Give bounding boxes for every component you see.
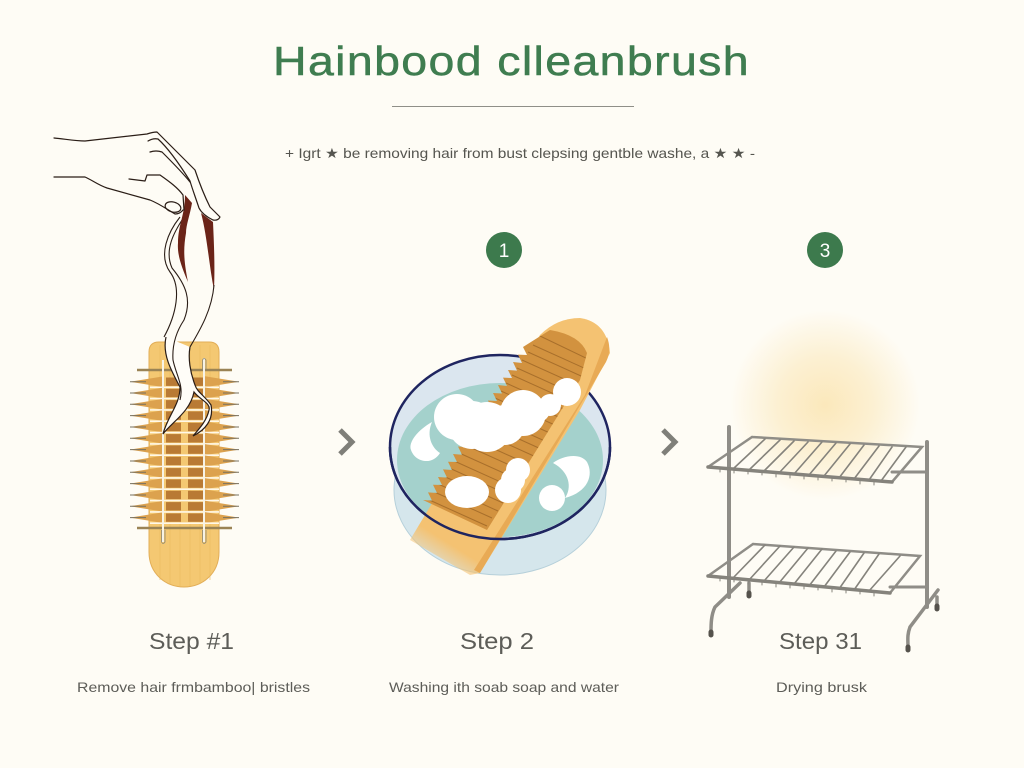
icon: bamboo brush — [130, 342, 239, 587]
icon: scrubbing brush — [410, 318, 610, 575]
icon: drying rack — [708, 427, 938, 650]
icon: soap suds — [410, 378, 590, 511]
badge: step 3: 3 — [820, 241, 830, 262]
badge: step 3 — [807, 232, 843, 268]
icon: hand — [54, 132, 220, 220]
panel: step 3 illustration — [708, 310, 938, 650]
step 2 description: Washing ith soab soap and water — [389, 679, 619, 695]
step 1 description: Remove hair frmbamboo| bristles — [77, 679, 310, 695]
arrow 1 — [340, 430, 352, 454]
title divider — [392, 106, 634, 107]
arrow 2 — [663, 430, 675, 454]
front bowl rim — [390, 447, 610, 539]
title: Hainbood clleanbrush — [273, 38, 750, 84]
badge: step 1 — [486, 232, 522, 268]
step 1 label: Step #1 — [149, 628, 234, 654]
panel: step 1 illustration — [54, 132, 239, 587]
icon: hair strands — [163, 195, 214, 436]
infographic canvas — [53, 45, 940, 695]
panel: step 2 illustration — [390, 318, 610, 575]
sun glow — [730, 310, 920, 500]
badge: step 1: 1 — [499, 241, 509, 262]
step 3 description: Drying brusk — [776, 679, 868, 695]
step 2 label: Step 2 — [460, 628, 534, 654]
subtitle: + Igrt ★ be removing hair from bust clepsing gentble washe, a ★ ★ - — [285, 145, 755, 161]
step 3 label: Step 31 — [779, 628, 862, 654]
icon: bowl — [390, 355, 610, 575]
